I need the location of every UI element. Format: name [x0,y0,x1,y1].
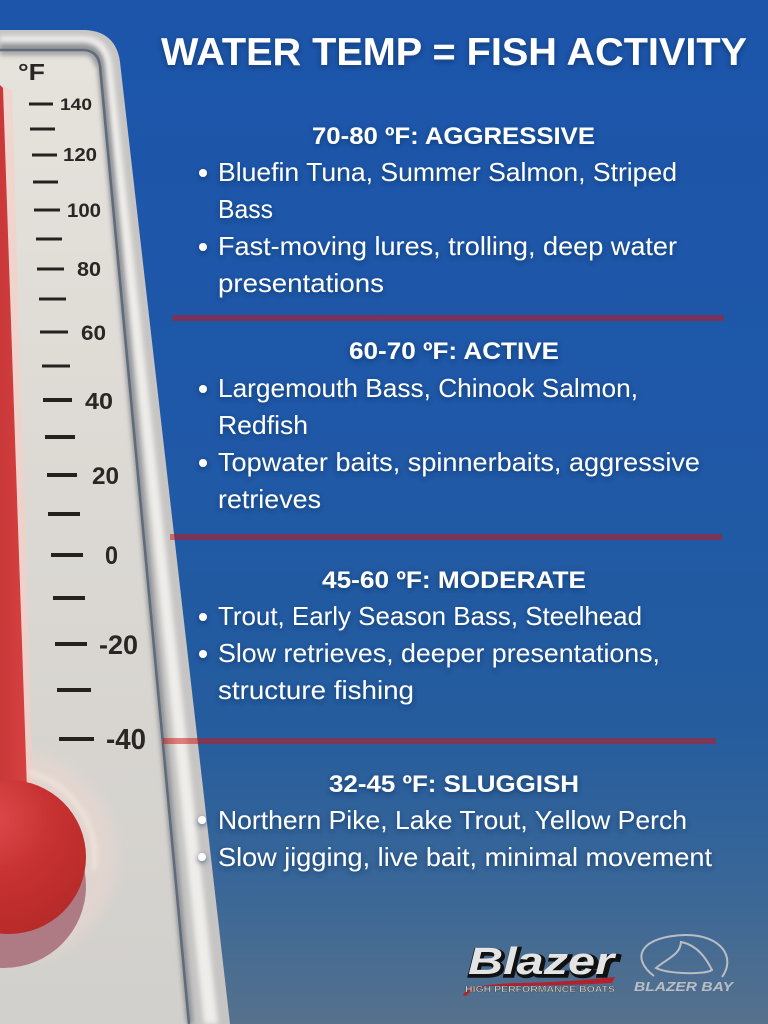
logo oval and fish tail [641,935,727,977]
scale labels: 80 [77,259,101,281]
tube glow [0,85,33,790]
scale labels: 120 [63,145,97,165]
thermometer outer casing [0,20,240,1024]
bulb shadow [0,804,86,968]
heading 60-70: 60-70 ºF: ACTIVE [349,338,559,365]
bullet list 45-60: Trout, Early Season Bass, Steelhead [218,601,642,631]
logo tagline: HIGH PERFORMANCE BOATS [465,984,615,994]
bullet list 45-60: structure fishing [218,675,414,705]
bullet list 70-80: Bluefin Tuna, Summer Salmon, Striped [218,157,677,187]
heading 32-45: 32-45 ºF: SLUGGISH [329,771,579,798]
bullet list 60-70: retrieves [218,484,321,514]
bullet list 45-60 [199,601,660,705]
bullet list 60-70: Redfish [218,410,308,440]
section: 70-80 aggressive [199,123,677,298]
bullet list 70-80: presentations [218,268,384,298]
logo: Blazer Bay [634,935,735,994]
scale ticks [29,104,94,739]
bullet list 32-45: Slow jigging, live bait, minimal movement [218,842,713,872]
divider 1 [172,315,724,321]
bullet list 45-60: Slow retrieves, deeper presentations, [218,638,660,668]
bullet list 60-70: Topwater baits, spinnerbaits, aggressive [218,447,700,477]
bullet list 70-80: Bass [218,194,273,224]
thermometer inner dark edge [0,50,189,1024]
scale labels: -20 [99,630,138,660]
bullet list 32-45 [198,805,713,872]
logo swoosh [463,977,615,996]
divider 2 [170,534,722,540]
title: WATER TEMP = FISH ACTIVITY [161,31,747,74]
red bulb [0,780,86,934]
thermometer inner edge line [0,48,190,1024]
heading 70-80: 70-80 ºF: AGGRESSIVE [312,123,595,150]
scale labels: 60 [81,322,106,345]
scale labels: 20 [92,463,119,490]
bullet list 32-45: Northern Pike, Lake Trout, Yellow Perch [218,805,687,835]
bullet list 70-80: Fast-moving lures, trolling, deep water [218,231,677,261]
logo wordmark shadow: Blazer [469,943,620,985]
red tube [0,85,27,790]
section: 45-60 moderate [199,567,660,705]
section: 60-70 active [199,338,700,514]
logo wordmark: Blazer [468,941,617,983]
logo: Blazer [463,941,620,996]
bullet list 60-70 [199,373,700,514]
scale labels: 40 [85,388,113,414]
thermometer inner edge shading [0,53,97,66]
scale labels [60,95,146,756]
bullet list 60-70: Largemouth Bass, Chinook Salmon, [218,373,638,403]
bullet list 70-80 [199,157,677,298]
bulb highlight ring [28,772,95,870]
divider 3 [163,738,716,744]
logo name: BLAZER BAY [634,979,735,994]
scale labels: 0 [105,542,118,570]
heading 45-60: 45-60 ºF: MODERATE [322,567,586,594]
scale unit: °F [18,59,45,85]
bulb glow [0,752,116,960]
scale labels: 140 [60,95,92,114]
scale labels: -40 [106,724,146,756]
thermometer face [0,50,188,1024]
thermometer illustration [0,20,240,1024]
scale labels: 100 [67,201,101,222]
section: 32-45 sluggish [198,771,713,872]
